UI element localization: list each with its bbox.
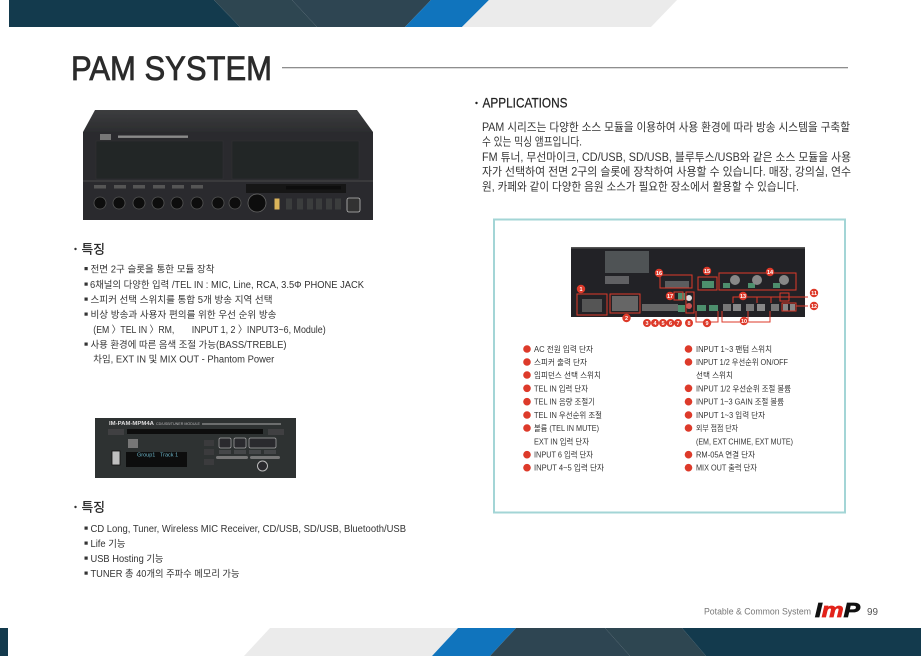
applications section (475, 94, 851, 194)
module product image: Group1 (137, 452, 155, 458)
numbered markers: 14 (767, 270, 774, 276)
legend left column: AC 전원 입력 단자 (534, 344, 593, 354)
legend right column (685, 344, 793, 473)
legend left column (523, 344, 604, 473)
red callout boxes (577, 273, 808, 322)
heading: applications: APPLICATIONS (482, 94, 568, 110)
numbered markers: 15 (704, 269, 710, 275)
legend left column: 임피던스 선택 스위치 (534, 370, 601, 380)
applications description (482, 120, 851, 194)
module feature lines: CD Long, Tuner, Wireless MIC Receiver, CD/USB, SD/USB, Bluetooth/USB (90, 524, 406, 535)
legend left column: EXT IN 입력 단자 (534, 436, 589, 446)
applications description: 원, 카페와 같이 다양한 음원 소스가 필요한 장소에서 활용할 수 있습니다. (482, 180, 799, 194)
numbered markers: 13 (740, 294, 746, 300)
features list 2 (74, 500, 406, 580)
numbered markers: 7 (676, 321, 680, 327)
module feature lines: USB Hosting 기능 (90, 553, 164, 565)
features list 1 (74, 242, 364, 366)
feature lines: (EM 〉TEL IN 〉RM, (93, 324, 174, 336)
numbered markers: 5 (661, 321, 665, 327)
heading: features: 특징 (82, 242, 105, 256)
legend right column: 외부 접점 단자 (696, 423, 738, 433)
numbered markers: 2 (625, 316, 628, 322)
numbered markers: 10 (741, 319, 747, 325)
applications description: 자가 선택하여 전면 2구의 슬롯에 장착하여 사용할 수 있습니다. 매장, 강의실, 연수 (482, 164, 851, 178)
legend left column: TEL IN 음량 조절기 (534, 397, 595, 407)
legend right column: INPUT 1~3 입력 단자 (696, 410, 765, 420)
legend right column: 선택 스위치 (696, 370, 733, 380)
amplifier product image (83, 110, 373, 220)
module feature lines (84, 524, 406, 580)
logo: ImP: ImP (815, 600, 861, 622)
legend right column: INPUT 1/2 우선순위 ON/OFF (696, 358, 788, 367)
panel: rear connections (494, 220, 845, 512)
numbered markers: 8 (687, 321, 691, 327)
page number: 99 (867, 606, 878, 618)
applications description: PAM 시리즈는 다양한 소스 모듈을 이용하여 사용 환경에 따라 방송 시스템을 구축할 (482, 120, 850, 134)
legend right column: MIX OUT 출력 단자 (696, 463, 757, 473)
applications description: FM 튜너, 무선마이크, CD/USB, SD/USB, 블루투스/USB와 같은 소스 모듈을 사용 (482, 151, 851, 164)
feature lines: 6채널의 다양한 입력 /TEL IN : MIC, Line, RCA, 3.5Φ PHONE JACK (90, 278, 364, 291)
numbered markers: 6 (669, 321, 672, 327)
module product image: IM-PAM-MPM4A (109, 421, 154, 427)
legend left column: TEL IN 입력 단자 (534, 383, 588, 393)
numbered markers: 16 (656, 271, 662, 277)
legend right column: INPUT 1/2 우선순위 조절 볼륨 (696, 383, 791, 393)
numbered markers: 9 (705, 321, 709, 327)
legend left column: INPUT 4~5 입력 단자 (534, 463, 604, 473)
rear panel image (571, 247, 805, 317)
module product image: Track 1 (160, 452, 178, 458)
title: PAM SYSTEM (71, 50, 272, 88)
feature lines: 스피커 선택 스위치를 통합 5개 방송 지역 선택 (90, 293, 272, 306)
module feature lines: TUNER 총 40개의 주파수 메모리 가능 (90, 568, 240, 580)
module product image: CD/USB/TUNER MODULE (156, 422, 201, 426)
legend right column: RM-05A 연결 단자 (696, 450, 755, 460)
legend left column: 스피커 출력 단자 (534, 357, 587, 367)
feature lines (84, 264, 364, 366)
module feature lines: Life 기능 (90, 538, 126, 550)
numbered markers (577, 267, 818, 327)
module product image (95, 418, 296, 478)
numbered markers: 12 (811, 304, 817, 310)
feature lines: INPUT 1, 2 〉INPUT3~6, Module) (192, 324, 326, 336)
numbered markers: 4 (653, 321, 657, 327)
numbered markers: 17 (667, 294, 673, 300)
feature lines: 사용 환경에 따른 음색 조절 가능(BASS/TREBLE) (90, 338, 286, 351)
legend right column: (EM, EXT CHIME, EXT MUTE) (696, 437, 793, 446)
applications description: 수 있는 믹싱 앰프입니다. (482, 136, 582, 148)
legend left column: 볼륨 (TEL IN MUTE) (534, 423, 599, 433)
legend left column: TEL IN 우선순위 조절 (534, 411, 602, 420)
legend right column: INPUT 1~3 GAIN 조절 볼륨 (696, 397, 784, 407)
heading: module features: 특징 (82, 500, 105, 514)
legend right column: INPUT 1~3 팬텀 스위치 (696, 344, 772, 354)
legend left column: INPUT 6 입력 단자 (534, 450, 593, 460)
feature lines: 전면 2구 슬롯을 통한 모듈 장착 (90, 264, 214, 276)
numbered markers: 3 (645, 321, 649, 327)
feature lines: 차임, EXT IN 및 MIX OUT - Phantom Power (93, 352, 275, 366)
bottom banner (0, 628, 921, 656)
footer caption: Potable & Common System (704, 606, 811, 616)
footer brand (704, 600, 878, 622)
numbered markers: 1 (579, 287, 583, 293)
feature lines: 비상 방송과 사용자 편의를 위한 우선 순위 방송 (90, 308, 276, 321)
top banner (9, 0, 677, 27)
numbered markers: 11 (811, 291, 817, 297)
